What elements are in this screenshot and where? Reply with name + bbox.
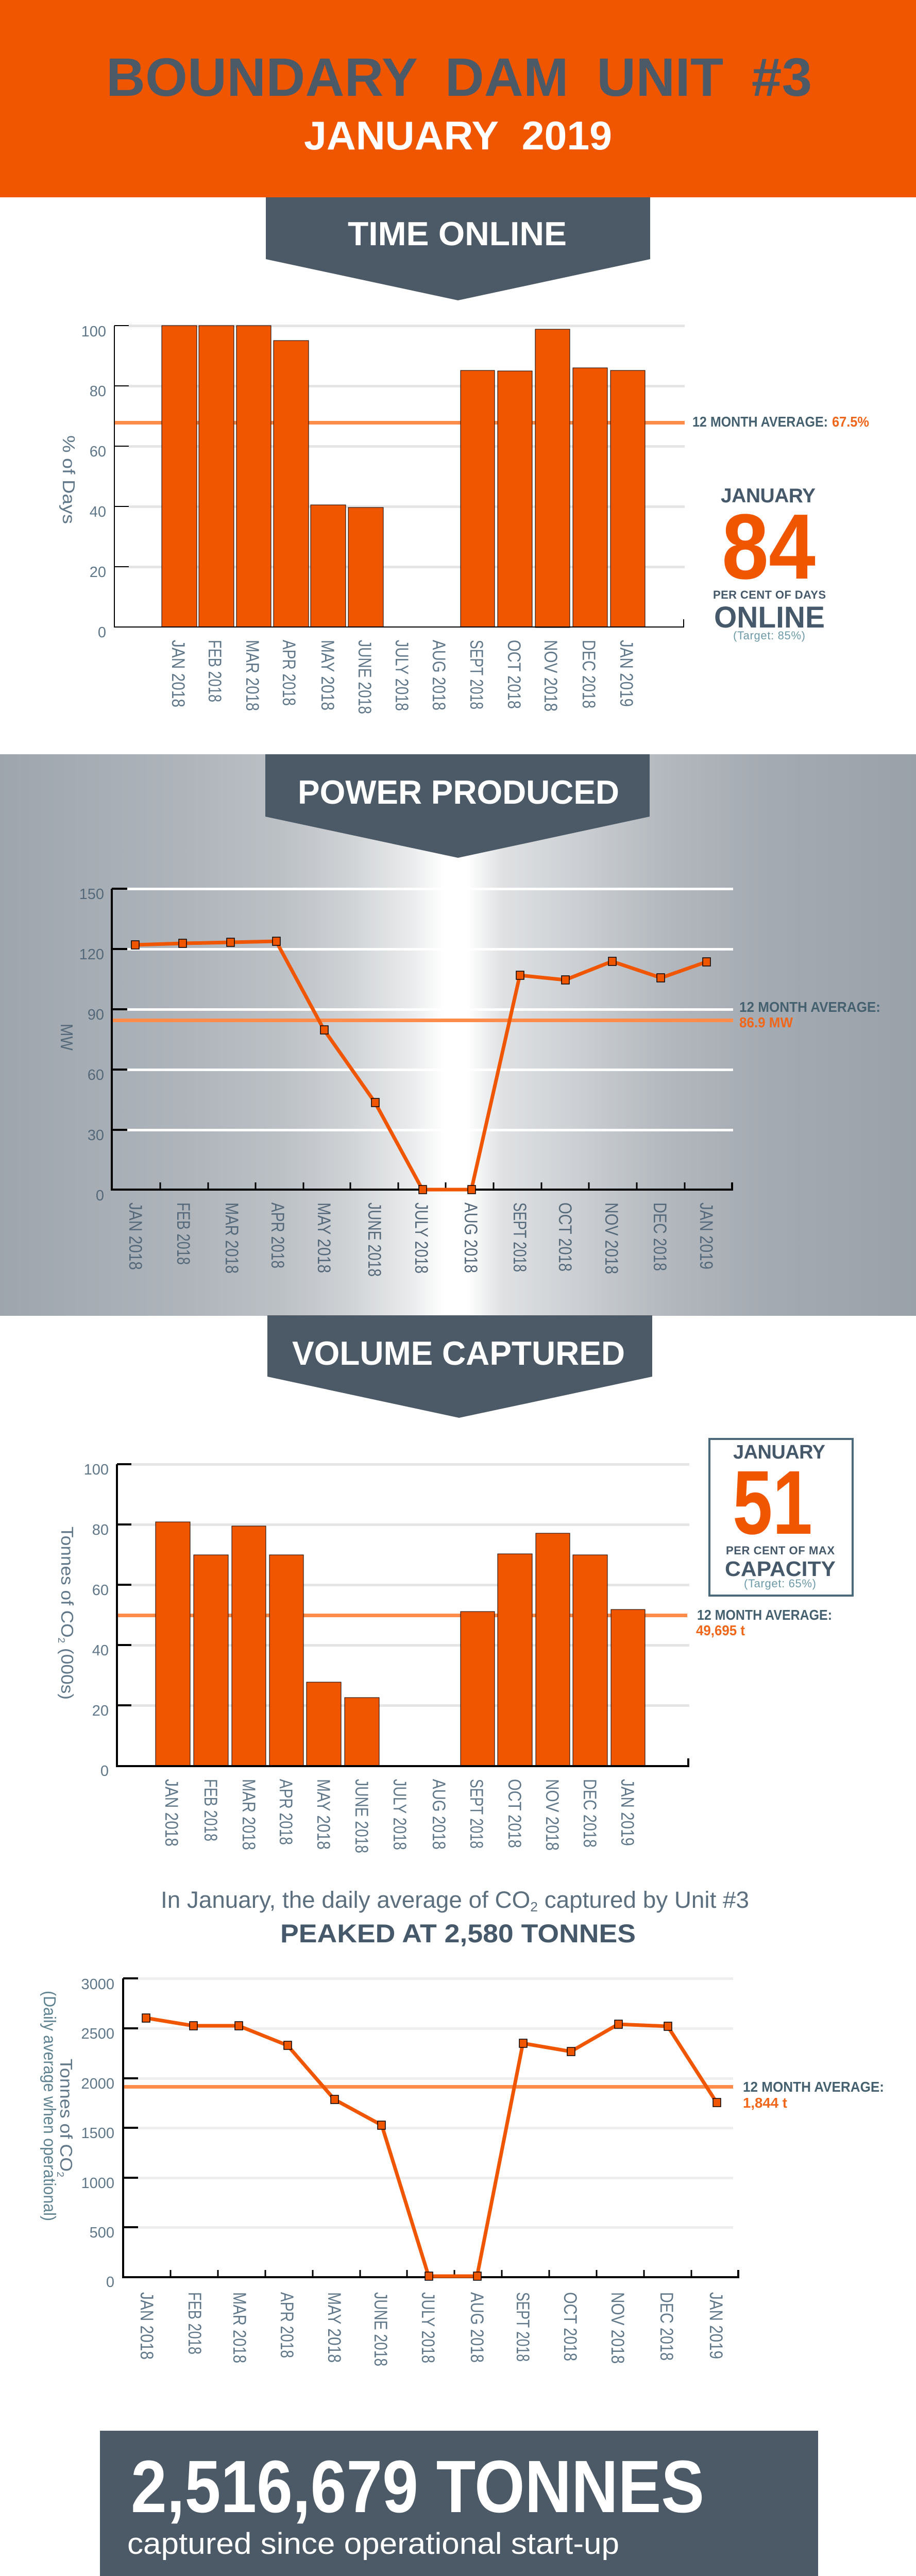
month labels: JUNE 2018 [354, 640, 375, 714]
month labels [137, 2292, 726, 2366]
month labels: OCT 2018 [560, 2292, 580, 2361]
section banner: time online [266, 197, 650, 300]
month labels: JAN 2018 [125, 1202, 145, 1270]
month labels: AUG 2018 [467, 2292, 487, 2363]
y axis labels: 20 [90, 564, 106, 581]
y axis labels: 60 [90, 444, 106, 460]
callout: 84 per cent online [713, 485, 826, 642]
month labels: OCT 2018 [504, 1779, 524, 1848]
y axis labels: 80 [90, 383, 106, 400]
y axis title: MW [57, 1024, 76, 1051]
y axis title: 2 [55, 2172, 65, 2177]
month labels: JUNE 2018 [370, 2292, 391, 2366]
month labels: MAY 2018 [324, 2292, 344, 2363]
callout: 84 per cent online: PER CENT OF DAYS [713, 588, 826, 601]
y axis labels: 20 [92, 1703, 109, 1719]
month labels: NOV 2018 [540, 640, 561, 711]
bar chart: volume captured [56, 1462, 689, 1853]
section banner: volume captured: VOLUME CAPTURED [292, 1334, 625, 1372]
y axis labels [79, 886, 104, 1204]
month labels: SEPT 2018 [510, 1202, 530, 1272]
month labels: NOV 2018 [607, 2292, 627, 2364]
y axis labels: 100 [84, 1462, 109, 1478]
text block: daily average peak: PEAKED AT 2,580 TONNES [280, 1919, 636, 1948]
average label: power produced: 86.9 MW [739, 1014, 793, 1030]
month labels: APR 2018 [267, 1202, 287, 1268]
callout box: 51 per cent capacity: 51 [733, 1452, 812, 1553]
month labels: FEB 2018 [184, 2292, 205, 2354]
callout: 84 per cent online: JANUARY [721, 485, 816, 507]
y axis labels: 40 [92, 1642, 109, 1659]
y axis labels: 120 [79, 946, 104, 963]
month labels: JAN 2019 [706, 2292, 726, 2359]
month labels [161, 1779, 637, 1853]
y axis labels: 0 [96, 1188, 104, 1204]
month labels: JULY 2018 [389, 1779, 410, 1850]
title: BOUNDARY DAM UNIT #3 [106, 47, 812, 108]
month labels: FEB 2018 [173, 1202, 193, 1265]
month labels: JAN 2018 [161, 1779, 181, 1846]
text block: daily average peak: In January, the daily average of CO [161, 1887, 524, 1913]
month labels: JUNE 2018 [351, 1779, 371, 1853]
y axis title: % of Days [59, 435, 78, 524]
month labels: AUG 2018 [461, 1202, 481, 1273]
month labels: JAN 2019 [616, 640, 636, 707]
y axis title: Tonnes of CO [57, 2059, 76, 2163]
month labels: AUG 2018 [429, 1779, 449, 1850]
header band [0, 0, 916, 197]
month labels: JAN 2019 [617, 1779, 637, 1846]
total figure: 2,516,679 TONNES [131, 2445, 704, 2528]
y axis labels: 90 [88, 1007, 104, 1023]
y axis title [40, 1991, 76, 2221]
month labels: MAR 2018 [229, 2292, 249, 2363]
month labels: SEPT 2018 [466, 640, 486, 709]
y axis labels: 60 [88, 1067, 104, 1083]
line chart: daily average CO2 [40, 1976, 738, 2366]
month labels: MAR 2018 [239, 1779, 259, 1850]
month labels: MAR 2018 [242, 640, 262, 711]
average label: time online: 67.5% [832, 414, 869, 430]
y axis labels [81, 324, 106, 641]
callout box: 51 per cent capacity: PER CENT OF MAX [726, 1544, 835, 1557]
average label: power produced: 12 MONTH AVERAGE: [739, 999, 880, 1015]
callout box: 51 per cent capacity: JANUARY [733, 1442, 825, 1463]
y axis labels: 40 [90, 504, 106, 520]
total caption: captured since operational start-up [127, 2527, 619, 2561]
month labels: JULY 2018 [418, 2292, 438, 2363]
month labels: NOV 2018 [601, 1202, 621, 1274]
line chart: power produced [57, 886, 733, 1277]
panel: power produced background [0, 754, 916, 1316]
y axis labels: 100 [81, 324, 106, 340]
month labels: APR 2018 [277, 2292, 297, 2358]
y axis labels [84, 1462, 109, 1780]
month labels: JULY 2018 [392, 640, 412, 711]
y axis labels: 80 [92, 1522, 109, 1538]
y axis title: 2 [56, 1638, 66, 1643]
month labels: DEC 2018 [650, 1202, 670, 1271]
y axis labels: 500 [90, 2225, 114, 2241]
month labels: MAY 2018 [314, 1202, 334, 1273]
month labels: FEB 2018 [205, 640, 225, 702]
average label: daily average CO2: 1,844 t [743, 2095, 787, 2111]
y axis labels: 2500 [81, 2026, 114, 2042]
y axis title: (Daily average when operational) [40, 1991, 59, 2221]
section banner: power produced [265, 754, 650, 858]
section banner: volume captured [267, 1315, 652, 1418]
callout box: 51 per cent capacity [709, 1439, 853, 1596]
month labels: OCT 2018 [504, 640, 524, 709]
month labels: JAN 2019 [696, 1202, 716, 1269]
month labels: JAN 2018 [137, 2292, 157, 2360]
month labels: FEB 2018 [200, 1779, 220, 1841]
y axis labels: 150 [79, 886, 104, 903]
average label: volume captured: 49,695 t [696, 1622, 745, 1638]
y axis labels: 0 [98, 624, 106, 641]
y axis labels: 30 [88, 1127, 104, 1144]
subtitle date: JANUARY 2019 [304, 113, 612, 158]
text block: daily average peak [161, 1887, 749, 1948]
y axis labels: 1500 [81, 2125, 114, 2142]
average label: volume captured: 12 MONTH AVERAGE: [697, 1607, 832, 1623]
section banner: time online: TIME ONLINE [348, 215, 567, 252]
month labels: NOV 2018 [542, 1779, 562, 1851]
y axis labels: 60 [92, 1582, 109, 1599]
month labels [125, 1202, 716, 1277]
y axis labels: 2000 [81, 2076, 114, 2092]
month labels: MAY 2018 [313, 1779, 333, 1850]
panel: total tonnes captured [100, 2431, 818, 2576]
average label: power produced [739, 999, 880, 1030]
callout box: 51 per cent capacity: CAPACITY [725, 1557, 836, 1581]
section banner: power produced: POWER PRODUCED [298, 773, 619, 811]
y axis labels: 1000 [81, 2175, 114, 2192]
y axis labels: 0 [106, 2274, 114, 2291]
month labels: SEPT 2018 [513, 2292, 533, 2362]
average label: time online: 12 MONTH AVERAGE: [692, 414, 828, 430]
month labels: JULY 2018 [411, 1202, 431, 1274]
month labels: OCT 2018 [555, 1202, 575, 1272]
month labels: DEC 2018 [656, 2292, 676, 2361]
month labels: DEC 2018 [579, 640, 599, 708]
average label: daily average CO2 [743, 2079, 884, 2111]
month labels [168, 640, 636, 714]
month labels: SEPT 2018 [466, 1779, 486, 1849]
average label: daily average CO2: 12 MONTH AVERAGE: [743, 2079, 884, 2095]
bar chart: time online [59, 324, 685, 714]
month labels: MAY 2018 [317, 640, 337, 710]
y axis labels: 3000 [81, 1976, 114, 1993]
callout box: 51 per cent capacity: (Target: 65%) [744, 1577, 816, 1590]
y axis title: (000s) [58, 1643, 77, 1700]
y axis labels [81, 1976, 114, 2291]
y axis title: Tonnes of CO [58, 1527, 77, 1631]
month labels: APR 2018 [279, 640, 299, 706]
month labels: AUG 2018 [429, 640, 449, 710]
y axis labels: 0 [100, 1763, 109, 1780]
text block: daily average peak: captured by Unit #3 [538, 1887, 749, 1913]
month labels: DEC 2018 [580, 1779, 600, 1848]
month labels: JAN 2018 [168, 640, 188, 707]
average label: volume captured [696, 1607, 832, 1638]
month labels: MAR 2018 [222, 1202, 242, 1274]
text block: daily average peak: 2 [530, 1899, 538, 1914]
callout: 84 per cent online: ONLINE [714, 601, 825, 634]
month labels: JUNE 2018 [364, 1202, 384, 1277]
month labels: APR 2018 [276, 1779, 296, 1845]
callout: 84 per cent online: 84 [722, 495, 816, 599]
callout: 84 per cent online: (Target: 85%) [733, 629, 805, 642]
